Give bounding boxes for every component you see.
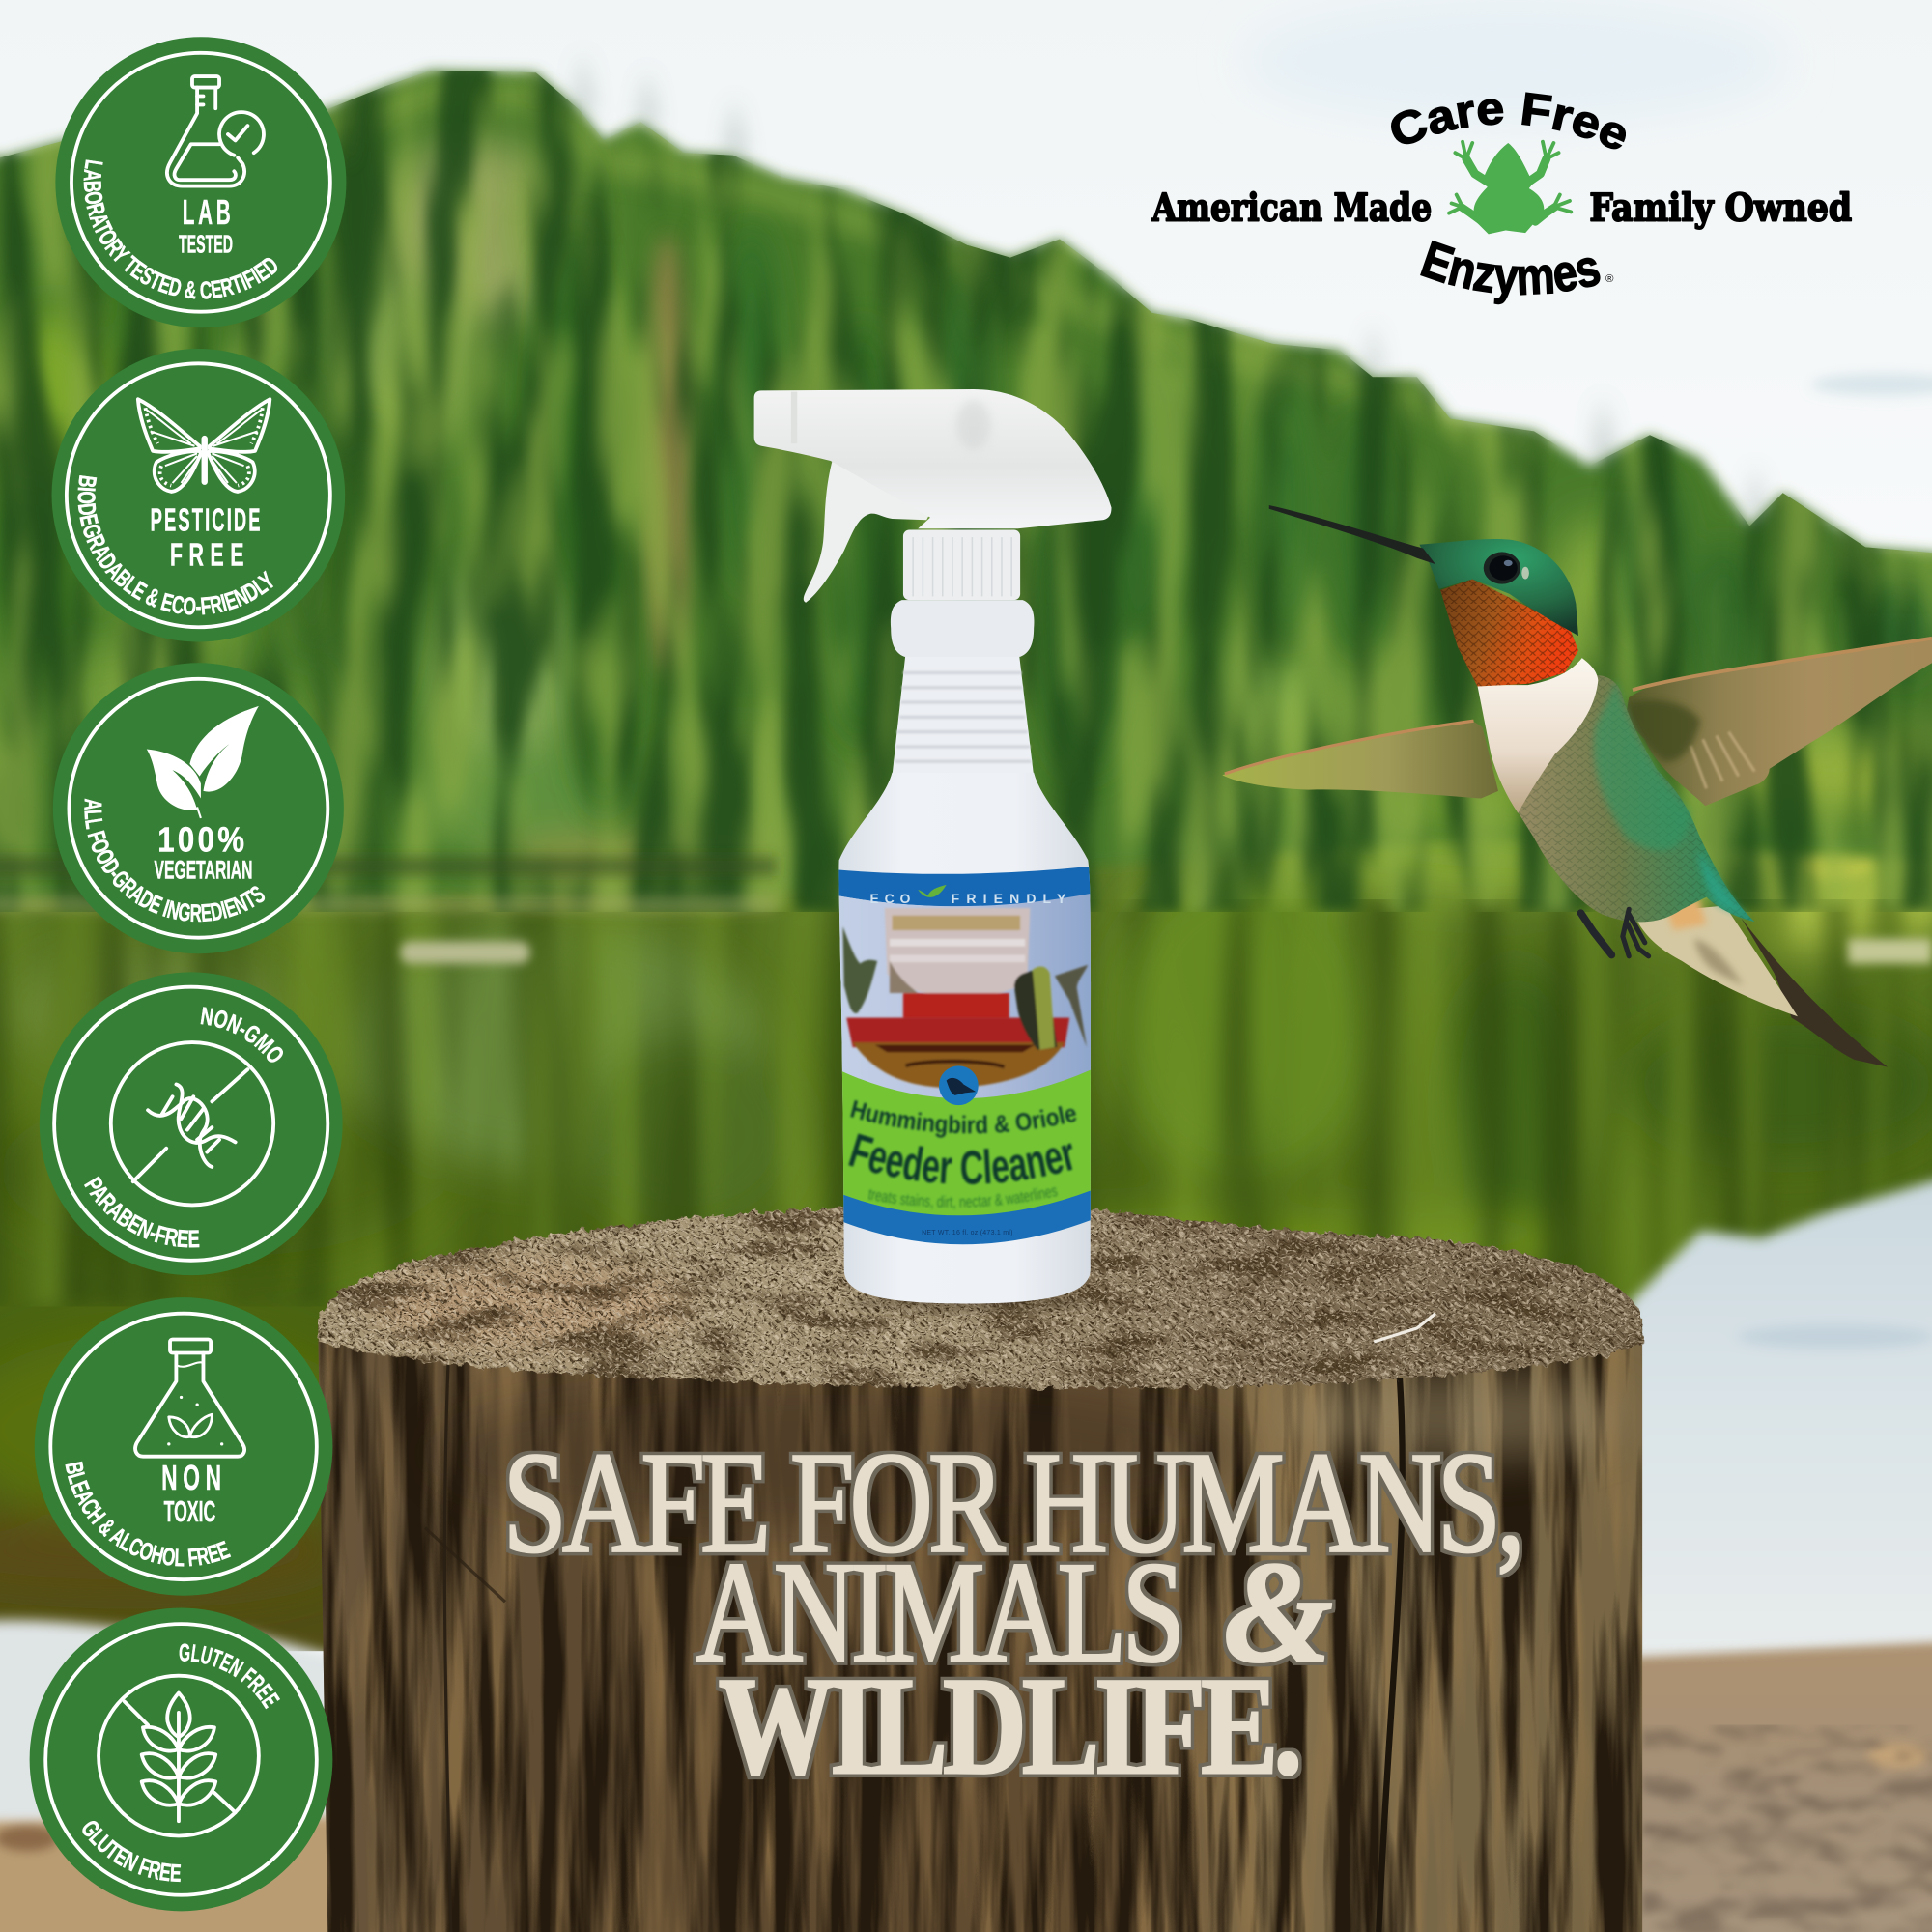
label text: 100% bbox=[157, 820, 247, 859]
right wing bbox=[1627, 639, 1932, 806]
badge: non toxic: TOXIC bbox=[164, 1495, 215, 1528]
badge: gluten free bbox=[30, 1608, 332, 1911]
label brand text: NET WT. 16 fl. oz (473.1 ml) bbox=[922, 1230, 1012, 1236]
icon: crossed wheat bbox=[125, 1693, 236, 1821]
label brand text: FRIENDLY bbox=[952, 891, 1072, 906]
headline: ANIMALS bbox=[696, 1531, 1180, 1692]
lake water bbox=[0, 777, 1932, 1651]
top text: GLUTEN FREE bbox=[179, 1639, 284, 1713]
label brand text bbox=[843, 891, 1081, 1236]
badge: pesticide free bbox=[52, 349, 345, 642]
bottom text: GLUTEN FREE bbox=[75, 1816, 182, 1888]
curved text: BIODEGRADABLE & ECO-FRIENDLY bbox=[72, 473, 280, 621]
headline: SAFE FOR HUMANS, bbox=[502, 1422, 1520, 1583]
badge: pesticide free: FREE bbox=[170, 537, 250, 573]
label brand text: Hummingbird & Oriole bbox=[849, 1099, 1078, 1139]
label leaf bbox=[918, 885, 947, 897]
curved text: LABORATORY TESTED & CERTIFIED bbox=[83, 159, 278, 299]
white chest bbox=[1477, 658, 1598, 813]
label seal bbox=[939, 1065, 979, 1105]
claim right: Family Owned bbox=[1589, 185, 1852, 230]
headline bbox=[502, 1422, 1520, 1804]
eye bbox=[1484, 552, 1529, 584]
label text: NON bbox=[161, 1459, 227, 1497]
product label bbox=[838, 867, 1092, 1244]
label text: LAB bbox=[183, 193, 234, 232]
brand logo bbox=[1151, 83, 1852, 306]
label brand text: Feeder Cleaner bbox=[847, 1132, 1074, 1186]
headline: & bbox=[1224, 1531, 1332, 1692]
headline: WILDLIFE. bbox=[719, 1648, 1297, 1804]
icon: flask with check bbox=[167, 76, 264, 186]
stump top surface bbox=[308, 1202, 1651, 1399]
sky reflection bbox=[0, 1173, 1932, 1824]
left wing bbox=[1222, 721, 1498, 799]
head bbox=[1419, 539, 1578, 636]
icon: flask with leaf bbox=[135, 1339, 244, 1457]
icon: crossed dna bbox=[133, 1069, 247, 1181]
tree stump bbox=[308, 1202, 1651, 1932]
product bottle bbox=[753, 389, 1111, 1316]
label brand text: ECO bbox=[870, 891, 916, 906]
badge: non toxic bbox=[35, 1297, 332, 1596]
bottle neck bbox=[891, 600, 1034, 777]
hummingbird bbox=[1222, 505, 1932, 1067]
registered mark: ® bbox=[1605, 273, 1614, 285]
curved text: BLEACH & ALCOHOL FREE bbox=[60, 1460, 234, 1572]
bottle body bbox=[838, 773, 1091, 1303]
claim left: American Made bbox=[1151, 185, 1432, 230]
badges bbox=[30, 37, 346, 1911]
label jar bbox=[842, 908, 1088, 1088]
brand name arc: Care Free bbox=[1391, 92, 1627, 149]
curved text: ALL FOOD-GRADE INGREDIENTS bbox=[78, 798, 270, 927]
top text: NON-GMO bbox=[199, 1003, 289, 1069]
tail bbox=[1741, 918, 1888, 1067]
beak bbox=[1269, 505, 1435, 564]
icon: leaves bbox=[147, 706, 259, 818]
icon: green frog bbox=[1449, 142, 1571, 234]
ribbed collar bbox=[903, 529, 1020, 600]
lower belly bbox=[1634, 897, 1798, 1016]
contact shadow bbox=[844, 1296, 1091, 1311]
ruby throat bbox=[1440, 579, 1578, 686]
green body bbox=[1509, 675, 1754, 922]
badge: vegetarian: VEGETARIAN bbox=[154, 855, 252, 884]
icon: butterfly bbox=[138, 399, 270, 492]
badge: non-gmo bbox=[40, 972, 343, 1275]
badge: lab tested: TESTED bbox=[179, 231, 233, 258]
stump side bbox=[308, 1306, 1651, 1932]
feet bbox=[1580, 909, 1649, 956]
spray trigger bbox=[804, 453, 931, 603]
badge: lab tested bbox=[55, 37, 346, 327]
enzymes arc: Enzymes bbox=[1420, 240, 1601, 305]
beach foreground bbox=[0, 1641, 1932, 1932]
bottom text: PARABEN-FREE bbox=[78, 1173, 200, 1253]
label text: PESTICIDE bbox=[151, 503, 263, 539]
badge: vegetarian bbox=[53, 663, 344, 953]
forest bbox=[0, 49, 1932, 912]
label brand text: treats stains, dirt, nectar & waterlines bbox=[867, 1186, 1059, 1209]
sprayer head bbox=[754, 389, 1112, 528]
